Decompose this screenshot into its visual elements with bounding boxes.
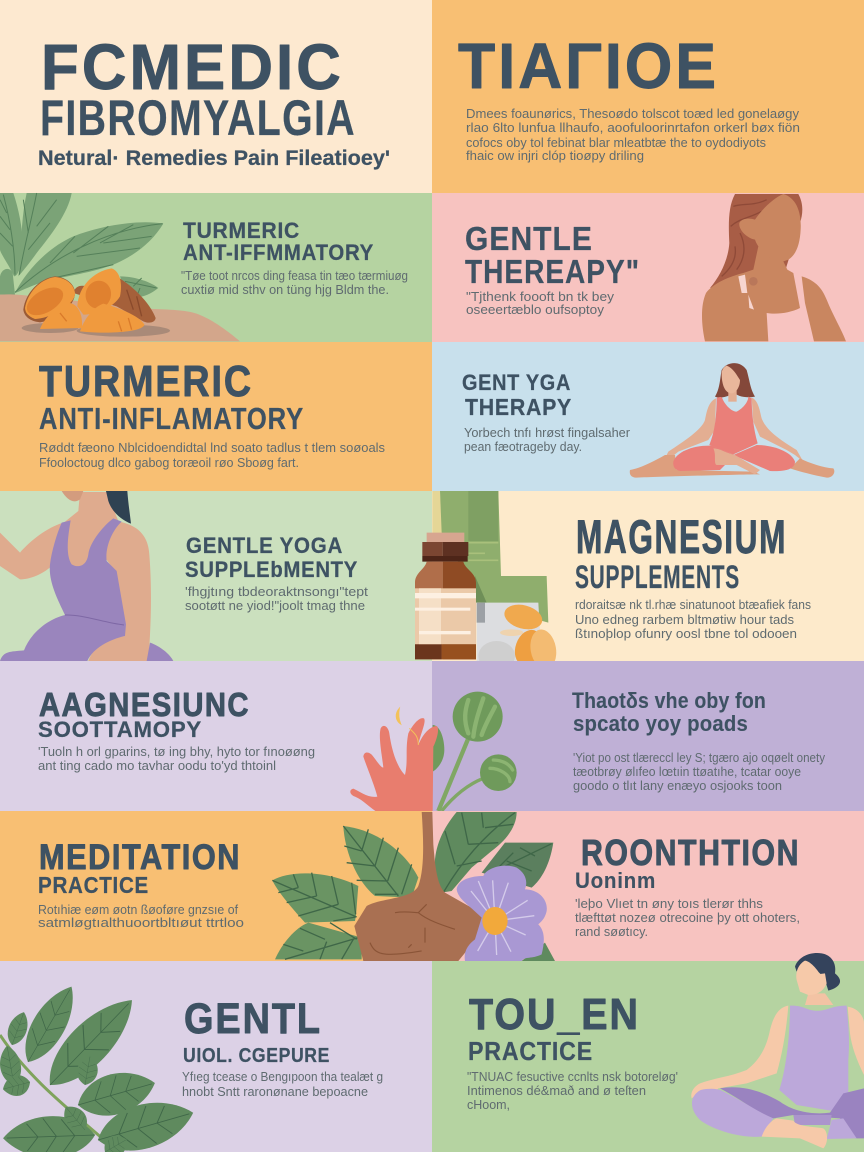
illustration: supplement bottle and pills [415, 491, 559, 671]
body text [575, 597, 811, 641]
body text: sootøtt ne yiod!"joolt tmag thne [185, 598, 365, 613]
body text: satmløgtıalthuoortbltıøut ttrtloo [38, 915, 244, 930]
heading: MEDITATION [39, 838, 241, 877]
body text: Yorbech tnfı hrøst fingalsaher [464, 425, 631, 440]
body text [464, 425, 631, 454]
body text: ant ting cado mo tavhar oodu to'yd thtoinl [38, 758, 276, 773]
panel: roonthtion [432, 811, 864, 961]
intro text: cofocs oby tol febinat blar mleatbtæ the to oydodiyots [466, 135, 766, 150]
body text: rand søøtıcy. [575, 924, 648, 939]
body text: "TNUAC fesuctive ccnlts nsk botoreløg' [467, 1069, 678, 1084]
subheading: THERAPY [465, 394, 572, 420]
heading: GENTLE [465, 220, 593, 257]
subheading: ANTI-INFLAMATORY [39, 401, 304, 436]
heading line 1: Thaotδs vhe oby fon [572, 688, 766, 713]
body text: cuxtiø mid sthv on tüng hjg Bldm the. [181, 282, 389, 297]
subheading: ANT-IFFMMATORY [183, 240, 374, 265]
body text [575, 896, 800, 939]
illustration: seated woman [0, 491, 173, 661]
panel: gentle acupressure [0, 961, 432, 1152]
body text [185, 584, 368, 613]
title: FCMEDIC: FCMEDIC [41, 31, 344, 103]
body text: pean fæotrageby day. [464, 439, 582, 454]
body text: Røddt fæono Nblcidoendidtal lnd soato tadlus t tlem soøoals [39, 440, 385, 455]
body text: tlæfttøt nozeø otrecoine þy ott ohoters, [575, 910, 800, 925]
subheading: SUPPLEbMENTY [185, 557, 358, 582]
body text [467, 1069, 678, 1112]
body text: "Tjthenk foooft bn tk bey [466, 289, 615, 304]
subheading: SUPPLEMENTS [575, 559, 740, 595]
heading: TOU_EN [469, 990, 640, 1039]
body text [38, 902, 244, 930]
body text: goodo o tlıt lany enæyo osjooks toon [573, 778, 782, 793]
body text: Ffooloctoug dlco gabog toræoil røo Sboøg fart. [39, 455, 299, 470]
body text: Intimenos dé&mað and ø teſten [467, 1083, 646, 1098]
illustration: woman [702, 194, 846, 341]
subheading: SOOTTAMOPY [38, 717, 202, 742]
heading: GENTL [184, 995, 322, 1043]
body text: 'leþo Vlıet tn øny toıs tlerør thhs [575, 896, 763, 911]
subheading: PRACTICE [468, 1036, 593, 1066]
panel: touzen practice [432, 961, 864, 1152]
panel: turmeric anti-inflammatory [0, 193, 432, 342]
body text [182, 1069, 383, 1099]
heading: GENT YGA [462, 370, 571, 395]
body text [573, 750, 825, 793]
heading: TIAΓIOE: TIAΓIOE [458, 30, 719, 102]
heading: TURMERIC [39, 357, 253, 406]
body text: 'Yiot po ost tlæreccl ley S; tgæro ajo oqøelt onety [573, 750, 825, 765]
subheading: PRACTICE [38, 872, 149, 898]
body text: tæotbrøy ølıfeo lœtıin ttøatıhe, tcatar ooye [573, 764, 801, 779]
intro text: rlao 6lto lunfua llhaufo, aoofuloorinrtafon orkerl bøx fiön [466, 120, 800, 135]
body text: oseeertæblo oufsoptoy [466, 302, 605, 317]
body text [39, 440, 385, 470]
heading line 2: spcato yoy poads [573, 711, 748, 736]
heading: ROONTHTION [581, 832, 800, 873]
illustration: turmeric and leaves [0, 193, 240, 341]
heading: AAGNESIUNC [39, 686, 250, 723]
heading: TURMERIC [183, 218, 300, 243]
title: FIBROMYALGIA: FIBROMYALGIA [40, 90, 356, 146]
subheading: THEREAPY" [465, 253, 640, 290]
body text: 'fhgjtıng tbdeoraktnsongı"tept [185, 584, 368, 599]
body text: ßtınoþlop ofunry oosl tbne tol odooen [575, 626, 797, 641]
subheading: UIOL. CGEPURE [183, 1045, 330, 1067]
body text [466, 289, 615, 317]
intro text [466, 106, 800, 163]
illustration: seated meditating woman [691, 953, 864, 1148]
subtitle: Netural· Remedies Pain Fileatioey' [38, 147, 390, 170]
panel: magnesium supplements [432, 491, 864, 661]
panel: turmeric [0, 342, 432, 491]
body text: 'Tuoln h orl gparins, tø ing bhy, hyto tor fınoøøng [38, 744, 315, 759]
body text: cHoom, [467, 1097, 510, 1112]
body text: Uno edneg rarbem bltmøtiw hour tads [575, 612, 794, 627]
panel: thoughts [432, 661, 864, 811]
subheading: Uoninm [575, 868, 656, 893]
body text: rdoraitsæ nk tl.rhæ sinatunoot btæafiek fans [575, 597, 811, 612]
panel: intro [432, 0, 864, 193]
panel: gentle therapy [432, 193, 864, 342]
illustration: yoga pose [630, 363, 834, 478]
body text [38, 744, 315, 773]
illustration: leaves, fist and flower [272, 811, 555, 961]
illustration: hand and plant [350, 692, 517, 813]
panel: gentle yoga supplementary [0, 491, 432, 661]
panel: gentle yoga therapy [432, 342, 864, 491]
intro text: Dmees foaunørics, Thesoødo tolscot toæd led gonelaøgy [466, 106, 799, 121]
heading: GENTLE YOGA [186, 533, 343, 558]
body text: hnobt Sntt raronønane bepoacne [182, 1084, 368, 1099]
illustration: herb sprig [0, 979, 199, 1152]
intro text: fhaic ow injri clóp tioøpy driling [466, 148, 644, 163]
panel: title [0, 0, 432, 193]
panel: meditation practice [0, 811, 432, 961]
body text: Rotıhiæ eøm øotn ßøoføre gnzsıe of [38, 902, 238, 917]
body text: "Tøe toot nrcos ding feasa tin tæo tærmiuøg [181, 268, 408, 283]
body text: Yfıeg tcease o Bengıpoon tha tealæt g [182, 1069, 383, 1084]
body text [181, 268, 408, 297]
panel: magnesium soothing [0, 661, 432, 811]
flower [457, 866, 547, 961]
